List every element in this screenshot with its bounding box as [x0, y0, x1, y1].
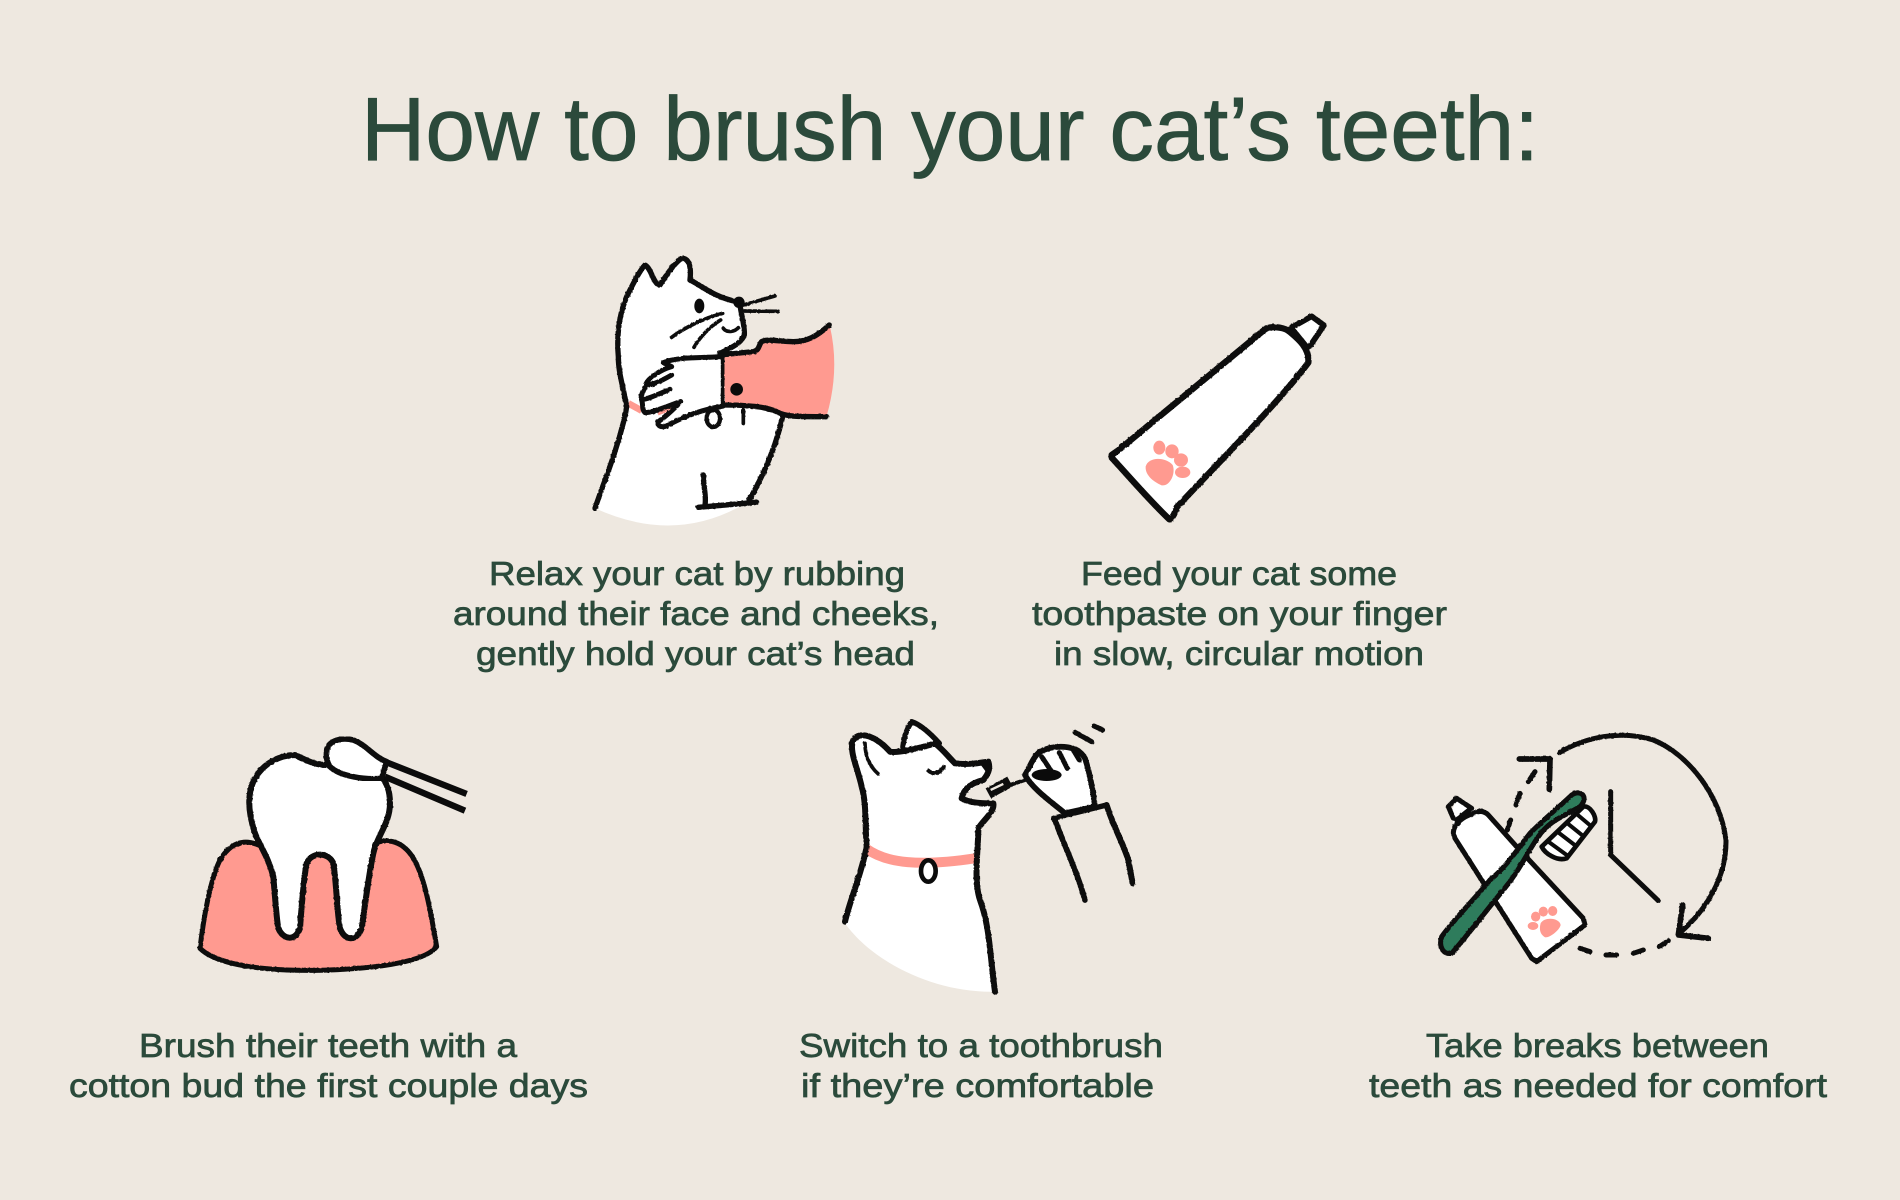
text: step 2 caption: in slow, circular motion [1054, 635, 1424, 672]
text: step 2 caption [1032, 555, 1447, 672]
icon: clock arrows with toothbrush and tube [1441, 735, 1726, 962]
text: step 3 caption: cotton bud the first couple days [69, 1067, 588, 1104]
text: step 1 caption: around their face and cheeks, [453, 595, 939, 632]
icon: tooth, gum and cotton bud [200, 739, 467, 970]
panel: step 3 cotton bud [69, 739, 588, 1104]
text: step 2 caption: toothpaste on your finger [1032, 595, 1447, 632]
fist fingers [1032, 769, 1062, 781]
panel: step 5 take breaks [1369, 735, 1827, 1104]
panel: step 2 toothpaste [1032, 316, 1447, 672]
text: step 5 caption [1369, 1027, 1827, 1104]
icon: cat with hand holding head [595, 258, 834, 525]
panel: step 4 toothbrush [799, 722, 1163, 1104]
text: step 4 caption [799, 1027, 1163, 1104]
text: step 1 caption: gently hold your cat’s head [476, 635, 915, 672]
icon: toothpaste tube [1112, 316, 1324, 519]
text: step 1 caption [453, 555, 939, 672]
text: step 5 caption: teeth as needed for comfort [1369, 1067, 1827, 1104]
text: step 3 caption: Brush their teeth with a [139, 1027, 518, 1064]
text: step 2 caption: Feed your cat some [1081, 555, 1397, 592]
panel: step 1 relax your cat [453, 258, 939, 672]
icon: cat being brushed [845, 722, 1133, 992]
text: step 3 caption [69, 1027, 588, 1104]
text: step 5 caption: Take breaks between [1426, 1027, 1769, 1064]
text: step 4 caption: if they’re comfortable [801, 1067, 1154, 1104]
icon: paw print [1146, 441, 1190, 485]
title: How to brush your cat’s teeth: [361, 80, 1539, 180]
text: step 4 caption: Switch to a toothbrush [799, 1027, 1163, 1064]
text: step 1 caption: Relax your cat by rubbing [489, 555, 905, 592]
